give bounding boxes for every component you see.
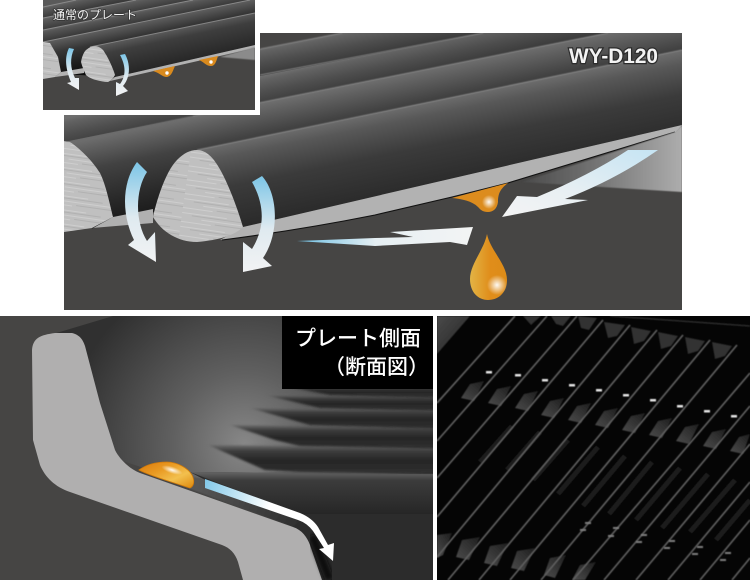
- arrow: left curved: [125, 162, 156, 262]
- panel: main plate WY-D120: [64, 33, 682, 310]
- panel: plate side cross-section: [0, 316, 445, 580]
- inset arrow right: [116, 54, 129, 96]
- arrow: long horizontal: [297, 227, 473, 246]
- inset label: 通常のプレート: [53, 8, 137, 22]
- inset front ridge: [90, 13, 255, 77]
- gray plate surface wedge: [522, 125, 682, 192]
- inset section centre: [81, 46, 115, 82]
- label box: [282, 316, 433, 389]
- arrow: right curved: [243, 176, 275, 272]
- inset strip: [55, 45, 255, 81]
- gray shade under arrow: [188, 478, 290, 526]
- ridge cross-section centre: [153, 150, 243, 242]
- white glints: [486, 371, 737, 418]
- inset wedge: [220, 47, 255, 60]
- model label: WY-D120: [569, 45, 658, 68]
- arrow: oil flow: [205, 479, 334, 561]
- shadow at plate edge: [312, 535, 330, 580]
- inset plate scene: [43, 0, 255, 110]
- rails: [437, 316, 750, 580]
- lower glints: [580, 522, 731, 561]
- label box: （断面図）: [324, 356, 429, 379]
- inset oil drips: [153, 56, 218, 77]
- oil drop falling: [470, 234, 507, 300]
- back ridges: [64, 33, 682, 227]
- grooves: [190, 389, 433, 492]
- ridge cross-section left: [64, 141, 113, 232]
- arrow: diagonal toward drop: [502, 150, 658, 217]
- long strips: [480, 426, 750, 540]
- gray patches upper row: [461, 381, 750, 454]
- oil lens: [139, 462, 194, 488]
- silver base strip: [92, 125, 682, 240]
- ridge highlight lines: [70, 33, 682, 150]
- gray patches lower row: [437, 533, 596, 580]
- inset arrow left: [66, 48, 79, 90]
- cross-section profile: [32, 333, 322, 580]
- plate interior: [57, 316, 433, 480]
- label box: プレート側面: [295, 328, 421, 350]
- lower dark floor: [190, 472, 401, 580]
- front ridge side: [197, 50, 682, 227]
- panel: inset normal plate: [43, 0, 260, 115]
- oil drop hanging: [452, 183, 508, 212]
- inset section left: [43, 42, 61, 79]
- panel: grill plate photo: [437, 316, 750, 580]
- inset back ridges: [43, 0, 255, 77]
- top wall notches: [437, 316, 750, 359]
